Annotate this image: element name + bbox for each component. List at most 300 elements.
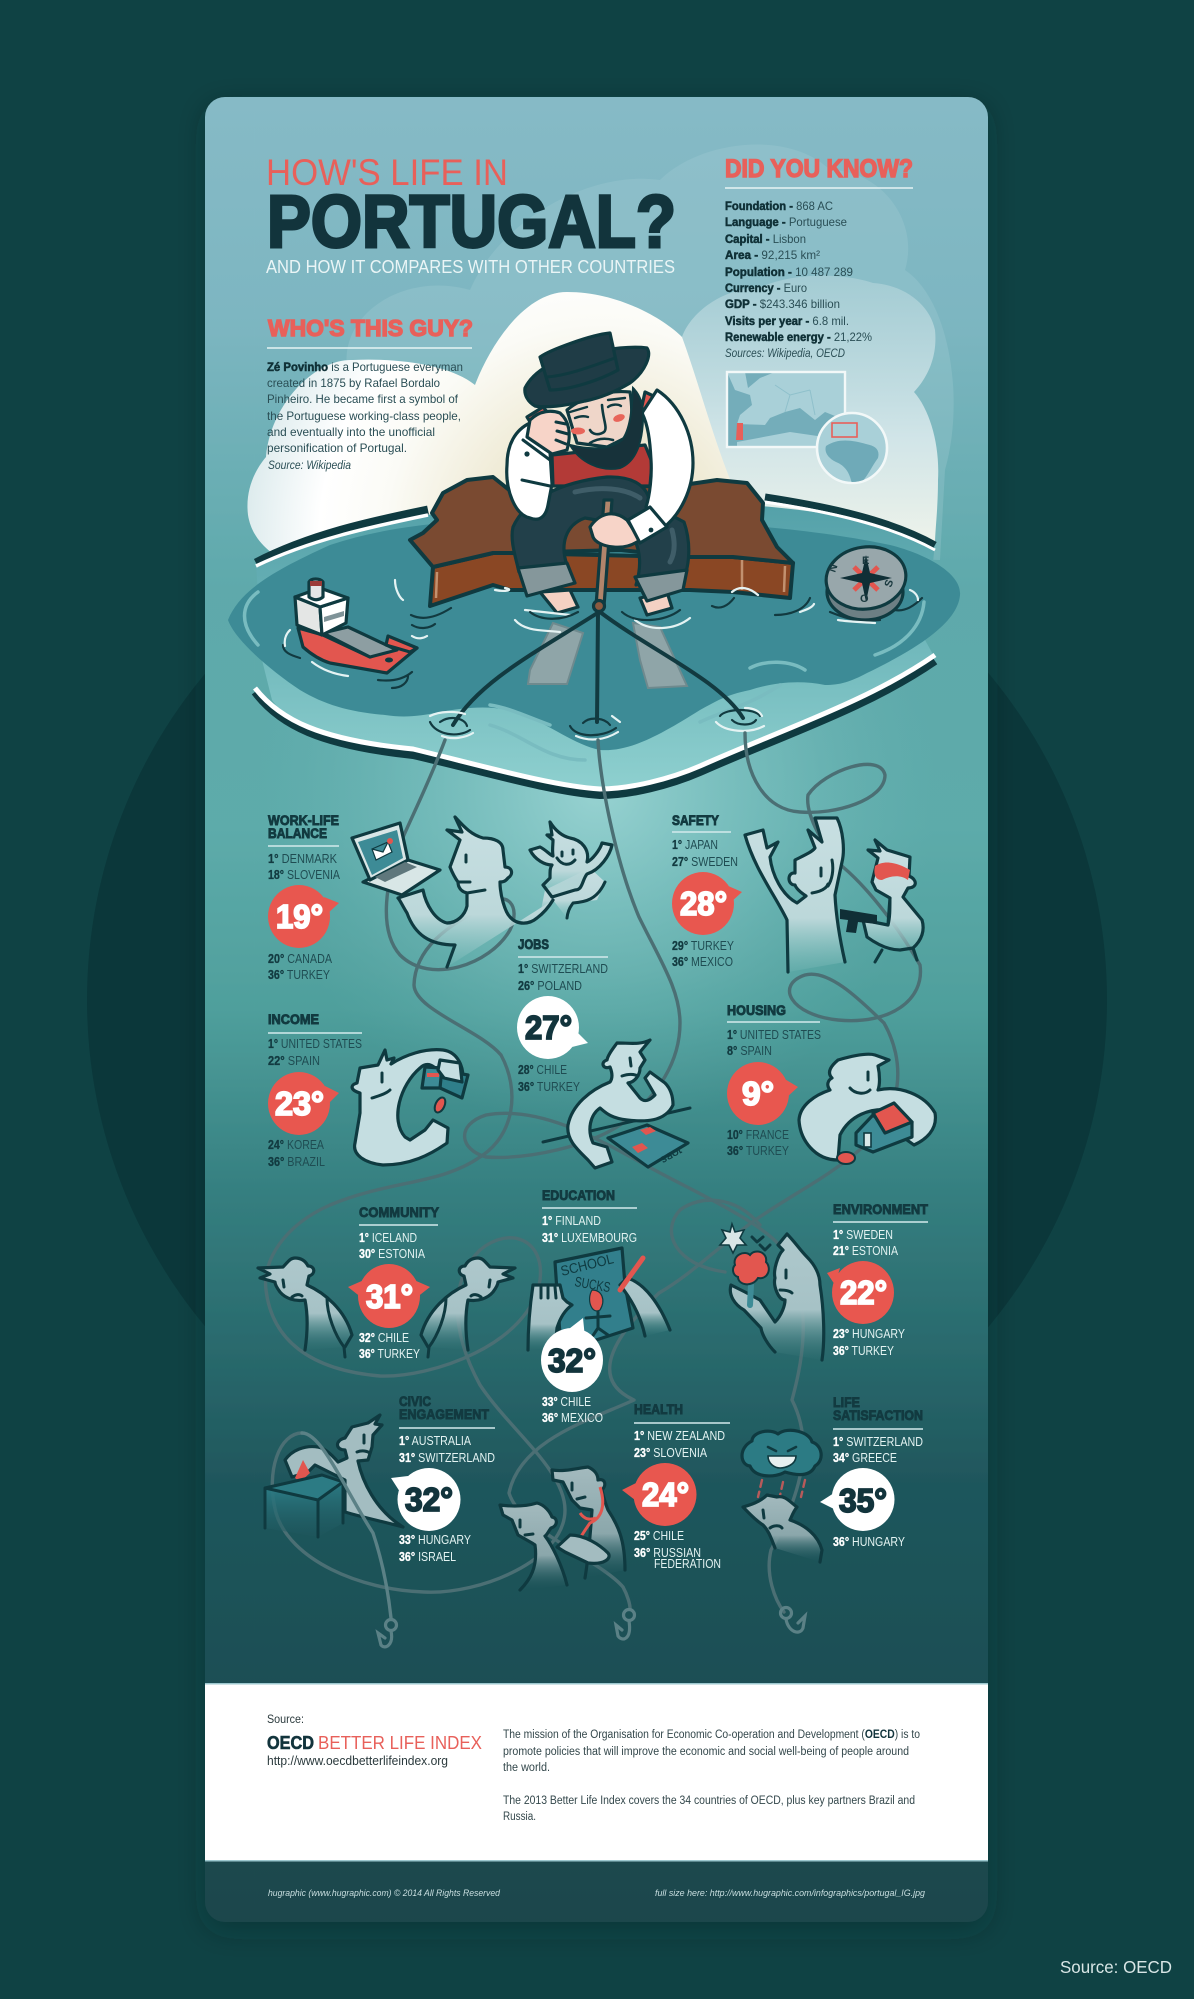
block: health: 25° CHILE: [634, 1528, 684, 1543]
right person: [421, 1258, 515, 1350]
block: work-life balance: 36° TURKEY: [268, 967, 330, 982]
block: housing: [727, 1002, 821, 1158]
bubble 32: [541, 1318, 603, 1392]
mission text: [503, 1729, 920, 1823]
panel: life satisfaction figure: [742, 1430, 822, 1562]
word sucks: SUCKS: [573, 1273, 612, 1295]
locator rectangle: [832, 423, 857, 437]
block: community: 36° TURKEY: [359, 1346, 420, 1361]
block: housing: 8° SPAIN: [727, 1043, 772, 1058]
water surface: [256, 500, 935, 790]
facts list: Currency - Euro: [725, 281, 807, 295]
ship ripples white: [285, 630, 348, 676]
hand on head: [527, 411, 569, 454]
block: safety: 36° MEXICO: [672, 954, 733, 969]
block: civic engagement: 36° ISRAEL: [399, 1549, 456, 1564]
better life index logo text: BETTER LIFE INDEX: [318, 1732, 482, 1753]
block: safety: SAFETY: [672, 812, 720, 828]
panel: education figure: [528, 1248, 670, 1350]
stick figure limbs: [586, 1312, 610, 1340]
block: community: [348, 1204, 440, 1361]
vest strap left: [525, 408, 548, 422]
lake dark water: [228, 520, 960, 750]
stethoscope: [580, 1487, 603, 1538]
source caption: Source: OECD: [1060, 1957, 1172, 1977]
map side highlights: [436, 560, 785, 598]
block: life satisfaction: 34° GREECE: [833, 1450, 897, 1465]
facts list: [725, 199, 872, 360]
block: jobs: [517, 936, 608, 1094]
bubble 28: [672, 872, 742, 935]
block: environment: ENVIRONMENT: [833, 1201, 928, 1217]
left cuff line: [522, 440, 550, 486]
block: environment: 1° SWEDEN: [833, 1227, 893, 1242]
paper: [555, 1248, 633, 1342]
face: [780, 1270, 792, 1293]
pencil: [620, 1258, 643, 1290]
man C-shape: [352, 1050, 463, 1165]
hook curve: [616, 1621, 630, 1639]
block: income: 36° BRAZIL: [268, 1154, 325, 1169]
ballot box top: [265, 1475, 343, 1500]
ship deck: [323, 627, 397, 657]
bubble 31: [348, 1264, 430, 1328]
cheeks: [571, 428, 585, 434]
hand on stick: [590, 514, 640, 547]
panel: environment figure: [720, 1224, 824, 1360]
sun icon: [720, 1224, 746, 1253]
front cloud right lump: [682, 276, 938, 541]
water-light beam below the surface: [352, 722, 842, 1062]
left person arm: [327, 1298, 345, 1357]
block: community: COMMUNITY: [359, 1204, 440, 1220]
left fingers: [541, 1287, 556, 1298]
right foot reflection: [633, 623, 687, 688]
block: civic engagement: CIVIC: [399, 1393, 431, 1409]
forearm outline: [567, 882, 605, 918]
compass letters: [827, 555, 896, 605]
facts list: Language - Portuguese: [725, 215, 847, 229]
letter O: O: [860, 593, 869, 605]
panel: source band: [205, 1683, 988, 1862]
mission text: promote policies that will improve the economic and social well-being of people around: [503, 1746, 909, 1758]
left person: [258, 1258, 352, 1350]
block: education: 36° MEXICO: [542, 1410, 603, 1425]
facts list: Area - 92,215 km²: [725, 248, 820, 262]
baby: [530, 822, 612, 897]
man reading: [568, 1040, 673, 1168]
icon: compass: [822, 542, 922, 623]
left rolled cuff: [518, 563, 575, 596]
ship cabin roof: [295, 588, 348, 607]
hat brim: [525, 347, 649, 407]
patient: [500, 1503, 567, 1590]
block: environment: [827, 1201, 928, 1358]
bubble 19: [268, 885, 339, 948]
block: work-life balance: BALANCE: [268, 825, 327, 841]
block: work-life balance: 19°: [276, 898, 323, 935]
ripple right white: [716, 708, 764, 731]
hat band: [547, 358, 615, 377]
facts list: Renewable energy - 21,22%: [725, 330, 872, 344]
wallet red card: [427, 1073, 439, 1077]
letter N: N: [827, 562, 841, 574]
map side faces: [430, 553, 793, 606]
background circle: [87, 490, 1107, 1510]
rain: [758, 1480, 805, 1505]
wallet card: [422, 1067, 442, 1088]
panel: civic engagement figure: [265, 1415, 403, 1618]
biography text: created in 1875 by Rafael Bordalo: [267, 376, 440, 390]
block: income: 23°: [275, 1085, 324, 1122]
right sleeve: [642, 390, 693, 528]
right rolled cuff: [635, 570, 687, 601]
tree crown: [733, 1251, 769, 1284]
biography text: Source: Wikipedia: [268, 458, 351, 472]
face: [372, 1073, 390, 1098]
ship cabin left face: [295, 597, 322, 635]
man face: [622, 1058, 638, 1076]
ship cabin right face: [320, 598, 348, 635]
face: [850, 1072, 870, 1093]
ripple left: [430, 718, 470, 734]
right cuff: [628, 507, 667, 543]
man hugging house: [799, 1054, 935, 1160]
icon: europe map: [727, 372, 845, 447]
ripple right: [720, 710, 760, 724]
block: income: 22° SPAIN: [268, 1053, 320, 1068]
block: work-life balance: 20° CANADA: [268, 951, 332, 966]
mission text: Russia.: [503, 1811, 536, 1823]
sad person: [743, 1495, 822, 1562]
patient face: [520, 1520, 533, 1535]
facts list: GDP - $243.346 billion: [725, 297, 840, 311]
man: [730, 1234, 824, 1360]
block: community: 30° ESTONIA: [359, 1246, 425, 1261]
hook: life satisfaction: [780, 1608, 805, 1632]
land masses: [727, 372, 845, 447]
mission text: the world.: [503, 1762, 550, 1774]
block: environment: 23° HUNGARY: [833, 1326, 905, 1341]
hook ring: [624, 1610, 634, 1620]
bubble 23: [268, 1072, 339, 1135]
block: civic engagement: 1° AUSTRALIA: [399, 1433, 471, 1448]
block: health: FEDERATION: [654, 1556, 721, 1571]
house roof: [873, 1103, 912, 1133]
facts list: Population - 10 487 289: [725, 265, 853, 279]
cloud eyes: [768, 1447, 796, 1451]
birds: [752, 1237, 770, 1250]
footer credits: [268, 1888, 926, 1899]
block: education: [541, 1187, 637, 1425]
block: civic engagement: [391, 1393, 495, 1564]
panel: jobs figure: [543, 1040, 690, 1168]
facts list: Foundation - 868 AC: [725, 199, 833, 213]
block: civic engagement: ENGAGEMENT: [399, 1406, 489, 1422]
block: education: 33° CHILE: [542, 1394, 591, 1409]
fishing lines from stick: [453, 612, 743, 725]
stick: [596, 500, 612, 606]
water body: [228, 497, 960, 795]
block: health: 36° RUSSIAN: [634, 1545, 701, 1560]
nose and mouth: [590, 405, 613, 443]
ripple centre: [570, 719, 616, 735]
left hand: [528, 1285, 572, 1350]
school sucks writing: [559, 1250, 615, 1295]
right line: [600, 612, 743, 718]
icon: globe: [817, 413, 887, 484]
doctor face: [572, 1483, 585, 1499]
word school: SCHOOL: [559, 1250, 615, 1279]
left person face: [283, 1280, 302, 1297]
block: housing: 9°: [742, 1075, 774, 1112]
right button: [649, 528, 653, 532]
block: jobs: 36° TURKEY: [518, 1079, 580, 1094]
block: income: INCOME: [268, 1011, 319, 1027]
house door: [864, 1133, 871, 1147]
car: [837, 1152, 855, 1164]
line to life satisfaction hook: [465, 740, 803, 1612]
block: life satisfaction: LIFE: [833, 1394, 860, 1410]
fishing lines under water: [266, 733, 920, 1612]
facts list: Sources: Wikipedia, OECD: [725, 346, 845, 360]
robber: [863, 840, 923, 960]
back clouds: [346, 144, 954, 560]
hook ring: [780, 1608, 792, 1618]
face: [567, 392, 632, 447]
hand on wallet: [438, 1060, 462, 1082]
vest: [552, 445, 652, 486]
block: jobs: 1° SWITZERLAND: [518, 961, 608, 976]
block: health: 23° SLOVENIA: [634, 1445, 707, 1460]
shore wave bottom dark: [255, 661, 935, 795]
water highlights: [244, 592, 924, 760]
right shin foot: [640, 592, 672, 615]
block: safety: [672, 812, 742, 969]
block: safety: 28°: [680, 885, 727, 922]
stick ball: [594, 600, 604, 612]
africa: [825, 440, 878, 484]
biography text: [267, 360, 463, 472]
ship bow: [386, 636, 417, 652]
right arm: [620, 1278, 670, 1336]
website: http://www.oecdbetterlifeindex.org: [267, 1754, 448, 1768]
bubble 9: [727, 1062, 798, 1125]
compass red star: [854, 567, 878, 590]
OECD logo text: OECD: [267, 1733, 314, 1753]
band top edge: [205, 1683, 988, 1684]
block: community: 31°: [366, 1278, 413, 1315]
ship ripples: [283, 645, 412, 688]
compass dark star: [840, 555, 892, 602]
title: [266, 152, 676, 277]
ripples at map: [411, 598, 810, 628]
person voting: [285, 1415, 403, 1527]
coin: [433, 1096, 447, 1114]
block: work-life balance: 18° SLOVENIA: [268, 867, 340, 882]
left sleeve: [507, 423, 552, 519]
bubble 22: [827, 1261, 894, 1324]
eyes and brows: [570, 398, 625, 418]
block: civic engagement: 31° SWITZERLAND: [399, 1450, 495, 1465]
shore wave top left: [256, 510, 428, 563]
shore wave top right: [765, 497, 935, 545]
cloud grin: [768, 1456, 796, 1468]
letter S: S: [883, 578, 896, 589]
full size link: full size here: http://www.hugraphic.com/infographics/portugal_IG.jpg: [655, 1888, 926, 1899]
block: jobs: 28° CHILE: [518, 1062, 567, 1077]
bubble 35: [820, 1468, 895, 1531]
heading: DID YOU KNOW?: [725, 155, 913, 183]
mission text: The 2013 Better Life Index covers the 34 countries of OECD, plus key partners Brazil and: [503, 1795, 915, 1807]
block: civic engagement: 32°: [405, 1481, 453, 1518]
hook: health: [616, 1610, 634, 1639]
ballot box front: [265, 1488, 318, 1537]
card panel: [205, 97, 988, 1922]
right arm fill: [540, 868, 605, 918]
subtitle: AND HOW IT COMPARES WITH OTHER COUNTRIES: [266, 256, 675, 277]
left line: [453, 612, 599, 725]
block: income: [268, 1011, 362, 1169]
biography text: Pinheiro. He became first a symbol of: [267, 392, 459, 406]
panel: community figures: [258, 1258, 515, 1357]
vest straps: [642, 390, 653, 408]
facts list: Visits per year - 6.8 mil.: [725, 314, 849, 328]
centre line: [597, 612, 598, 722]
block: education: 32°: [548, 1342, 596, 1379]
block: income: 1° UNITED STATES: [268, 1036, 362, 1051]
laptop screen: [352, 823, 408, 880]
left foot reflection: [528, 623, 583, 684]
block: safety: 27° SWEDEN: [672, 854, 738, 869]
right person face: [471, 1280, 490, 1297]
block: jobs: JOBS: [518, 936, 549, 952]
biography text: and eventually into the unofficial: [267, 425, 435, 439]
icon: ship: [283, 579, 417, 688]
knee highlight: [575, 489, 674, 562]
block: environment: 36° TURKEY: [833, 1343, 894, 1358]
doctor hand: [557, 1535, 609, 1563]
left shin foot: [540, 590, 578, 613]
copyright: hugraphic (www.hugraphic.com) © 2014 All Rights Reserved: [268, 1888, 501, 1899]
panel: housing figure: [799, 1054, 935, 1164]
bubble 27: [517, 996, 588, 1059]
title line 1: HOW'S LIFE IN: [266, 152, 508, 193]
reflected feet: [528, 623, 687, 688]
block: community: 32° CHILE: [359, 1330, 409, 1345]
facts list: Capital - Lisbon: [725, 232, 806, 246]
ship cabin windows: [324, 611, 344, 622]
laptop screen inner: [358, 830, 403, 875]
panel: health figures: [500, 1467, 625, 1590]
block: life satisfaction: 36° HUNGARY: [833, 1534, 905, 1549]
laptop base: [363, 860, 440, 895]
block: safety: 1° JAPAN: [672, 837, 718, 852]
ship funnel band: [310, 581, 322, 586]
ship porthole: [385, 658, 393, 662]
person face: [763, 1510, 782, 1528]
block: work-life balance: WORK-LIFE: [268, 812, 339, 828]
ripple left white: [430, 712, 473, 738]
bubble 32: [391, 1468, 461, 1531]
biography text: personification of Portugal.: [267, 441, 407, 455]
compass ripples: [830, 598, 922, 621]
block: life satisfaction: 1° SWITZERLAND: [833, 1434, 923, 1449]
hook: civic: [378, 1620, 396, 1647]
mask: [874, 863, 910, 880]
source label: Source:: [267, 1712, 304, 1726]
newspaper blocks: [632, 1127, 656, 1153]
ship hull: [298, 628, 417, 673]
block: education: 1° FINLAND: [542, 1213, 601, 1228]
man with laptop: [398, 817, 553, 967]
illustration clipped to the card: [205, 145, 988, 1647]
block: life satisfaction: SATISFACTION: [833, 1407, 923, 1423]
block: health: 1° NEW ZEALAND: [634, 1428, 725, 1443]
panel: income figure: [352, 1050, 468, 1165]
panel: safety figures: [745, 818, 923, 972]
map of Portugal block: [410, 477, 793, 606]
beard: [570, 388, 643, 469]
shore wave bottom white: [255, 655, 935, 789]
hat crown: [540, 333, 618, 390]
panel: did you know: [725, 155, 913, 484]
biography text: Zé Povinho is a Portuguese everyman: [267, 360, 463, 374]
character: Ze Povinho: [507, 333, 693, 615]
panel: who's this guy: [267, 315, 473, 472]
block: jobs: 26° POLAND: [518, 978, 582, 993]
white band: [205, 1684, 988, 1861]
shore wave top left highlight: [256, 515, 428, 566]
finger lines: [556, 422, 568, 444]
map lines: [775, 385, 815, 415]
storm cloud: [742, 1430, 821, 1476]
ripples at feet dark: [530, 610, 680, 620]
shore wave top right highlight: [765, 502, 935, 550]
trousers: [512, 477, 689, 585]
letter E: E: [862, 555, 869, 567]
block: education: 31° LUXEMBOURG: [542, 1230, 637, 1245]
biography text: the Portuguese working-class people,: [267, 409, 461, 423]
line to civic hook: [266, 740, 565, 1592]
man face: [458, 855, 485, 893]
face: [357, 1435, 370, 1453]
robber leg line: [875, 898, 890, 962]
ripples at map white: [395, 580, 814, 638]
environment loop: [671, 1200, 760, 1272]
block: housing: 10° FRANCE: [727, 1127, 789, 1142]
ballot box outline: [265, 1475, 343, 1537]
left button: [524, 451, 530, 457]
block: work-life balance: 1° DENMARK: [268, 851, 337, 866]
line to health hook: [509, 733, 920, 1608]
baby smile: [557, 850, 575, 864]
block: income: 24° KOREA: [268, 1137, 324, 1152]
compass base: [827, 564, 903, 620]
panel: work-life balance figures: [352, 817, 612, 967]
victim: [745, 818, 845, 972]
block: health: 24°: [642, 1476, 689, 1513]
newspaper title: JOBS: [659, 1144, 685, 1165]
ballot: [295, 1460, 310, 1482]
ballot box side: [318, 1482, 343, 1537]
compass ripples white: [838, 590, 918, 623]
mission text: The mission of the Organisation for Economic Co-operation and Development (OECD) is to: [503, 1729, 920, 1741]
block: health: HEALTH: [634, 1401, 683, 1417]
ripples: [395, 580, 814, 739]
cheek right: [612, 413, 626, 423]
table line: [543, 1108, 690, 1142]
